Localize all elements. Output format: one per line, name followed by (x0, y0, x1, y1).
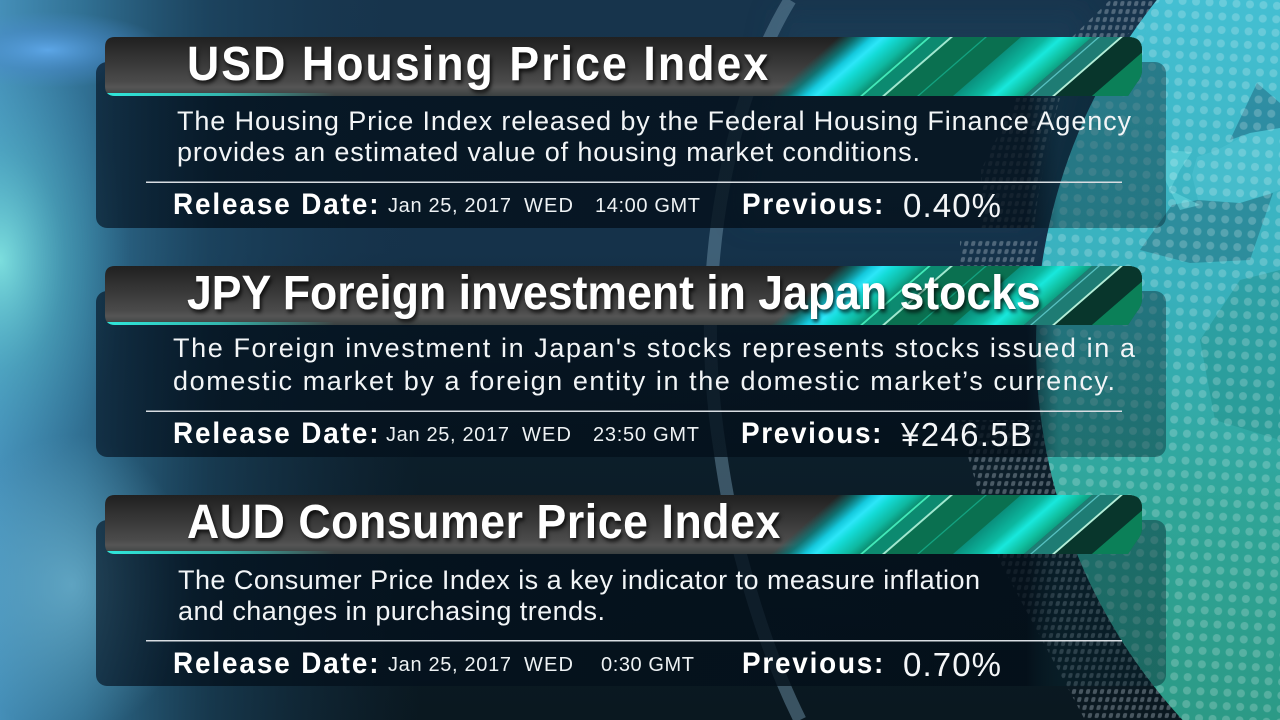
previous value: 0.40% (903, 187, 1001, 224)
decorative ring arc (710, 0, 800, 720)
release date (173, 188, 700, 221)
release date: Release Date: (173, 188, 379, 221)
description (177, 106, 1132, 167)
release date: Jan 25, 2017 (388, 195, 511, 217)
previous value (741, 416, 1032, 453)
description: provides an estimated value of housing market conditions. (177, 137, 920, 167)
description (173, 333, 1136, 396)
release date: WED (524, 195, 573, 217)
release date: WED (522, 424, 571, 446)
previous value: Previous: (742, 188, 883, 221)
dotted dark sphere (957, 0, 1190, 720)
release date: Jan 25, 2017 (386, 424, 509, 446)
description: The Housing Price Index released by the Federal Housing Finance Agency (177, 106, 1132, 136)
continents (1140, 83, 1280, 440)
header bar (105, 37, 1210, 96)
previous value: ¥246.5B (900, 416, 1032, 453)
release date: 23:50 GMT (593, 424, 699, 446)
panel: AUD Consumer Price Index (96, 495, 1210, 686)
release date: Jan 25, 2017 (388, 654, 511, 676)
previous value: 0.70% (903, 646, 1001, 683)
description: and changes in purchasing trends. (178, 596, 605, 626)
header bar (105, 495, 1210, 554)
release date: WED (524, 654, 573, 676)
previous value (742, 646, 1001, 683)
previous value: Previous: (741, 417, 881, 450)
globe (1020, 0, 1280, 720)
release date: 0:30 GMT (601, 654, 694, 676)
header bar (105, 266, 1210, 325)
release date: Release Date: (173, 647, 379, 680)
release date: 14:00 GMT (595, 195, 700, 217)
panel body (96, 520, 1166, 686)
description (178, 565, 980, 626)
description: The Consumer Price Index is a key indicator to measure inflation (178, 565, 980, 595)
description: domestic market by a foreign entity in the domestic market’s currency. (173, 366, 1115, 396)
panel: USD Housing Price Index (96, 37, 1210, 228)
release date: Release Date: (173, 417, 379, 450)
heading: USD Housing Price Index (187, 37, 768, 90)
panel body (96, 291, 1166, 457)
release date (173, 417, 699, 450)
heading: AUD Consumer Price Index (187, 495, 781, 548)
heading: JPY Foreign investment in Japan stocks (187, 266, 1041, 319)
panel body (96, 62, 1166, 228)
previous value (742, 187, 1001, 224)
description: The Foreign investment in Japan's stocks represents stocks issued in a (173, 333, 1136, 363)
release date (173, 647, 694, 680)
previous value: Previous: (742, 647, 883, 680)
panel: JPY Foreign investment in Japan stocks (96, 266, 1210, 457)
